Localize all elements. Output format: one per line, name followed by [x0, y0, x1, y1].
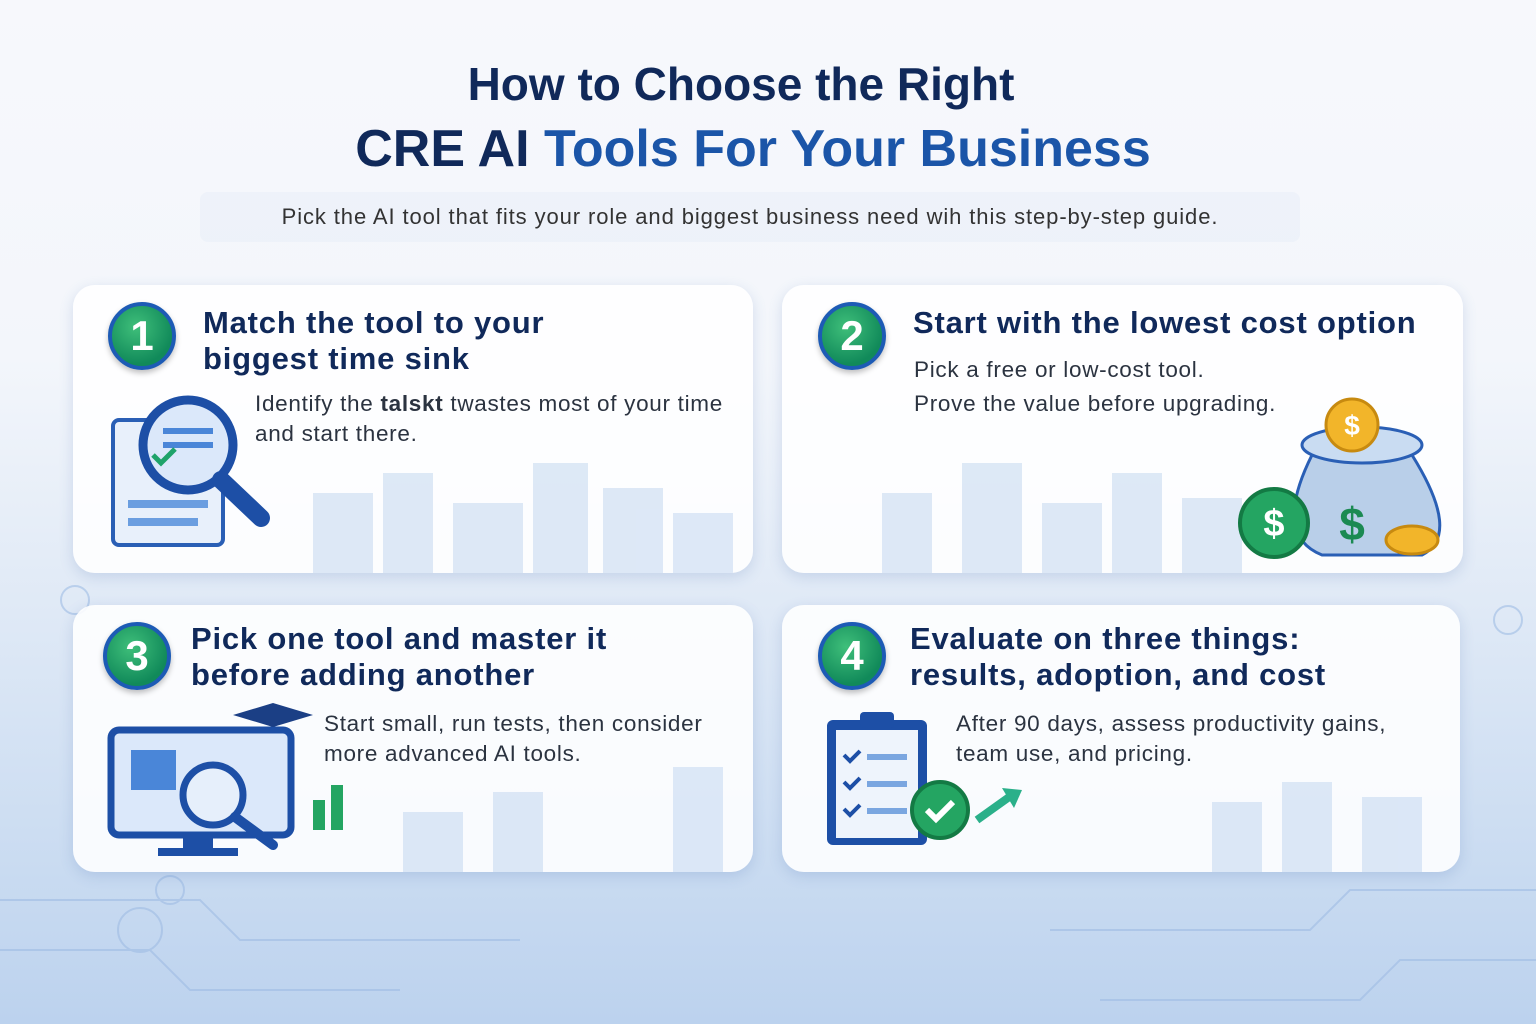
panel: step 4	[782, 605, 1460, 872]
panel: step 2	[782, 285, 1463, 573]
badge 1	[108, 302, 176, 370]
heading 2: Start with the lowest cost option	[913, 305, 1416, 340]
heading 4: results, adoption, and cost	[910, 657, 1326, 692]
text 2: Pick a free or low-cost tool.	[914, 357, 1204, 382]
text 2: Prove the value before upgrading.	[914, 391, 1276, 416]
subtitle	[200, 192, 1300, 242]
text 1: and start there.	[255, 421, 418, 446]
badge 2: 2	[840, 312, 864, 359]
badge 3	[103, 622, 171, 690]
text 3: Start small, run tests, then consider	[324, 711, 703, 736]
badge 4	[818, 622, 886, 690]
icon: money bag	[1238, 398, 1442, 559]
subtitle: Pick the AI tool that fits your role and biggest business need wih this step-by-step guide.	[282, 204, 1218, 229]
heading 4: Evaluate on three things:	[910, 621, 1300, 656]
heading 3: Pick one tool and master it	[191, 621, 607, 656]
text 2	[914, 357, 1276, 416]
heading 1: Match the tool to your	[203, 305, 544, 340]
title: How to Choose the Right	[468, 58, 1014, 110]
icon: money bag: $	[1263, 503, 1285, 545]
heading 3: before adding another	[191, 657, 535, 692]
icon: clipboard check	[827, 712, 1022, 845]
heading 1: biggest time sink	[203, 341, 470, 376]
panel: step 3	[73, 605, 753, 872]
title	[355, 58, 1151, 178]
badge 1: 1	[130, 312, 154, 359]
title: CRE AI Tools For Your Business	[355, 120, 1151, 178]
text 1	[255, 391, 723, 446]
text 4	[956, 711, 1386, 766]
text 4: After 90 days, assess productivity gains,	[956, 711, 1386, 736]
text 3	[324, 711, 703, 766]
text 3: more advanced AI tools.	[324, 741, 582, 766]
background circuit pattern	[0, 585, 1536, 1001]
text 1: Identify the talskt twastes most of your time	[255, 391, 723, 416]
icon: magnifier document	[111, 396, 270, 547]
badge 3: 3	[125, 632, 149, 679]
heading 3	[191, 621, 607, 692]
badge 4: 4	[840, 632, 864, 679]
icon: monitor with magnifier	[108, 703, 343, 856]
icon: money bag: $	[1344, 410, 1360, 441]
panel: step 1	[73, 285, 753, 573]
heading 4	[910, 621, 1326, 692]
icon: money bag: $	[1339, 498, 1365, 550]
badge 2	[818, 302, 886, 370]
heading 1	[203, 305, 544, 376]
text 4: team use, and pricing.	[956, 741, 1193, 766]
